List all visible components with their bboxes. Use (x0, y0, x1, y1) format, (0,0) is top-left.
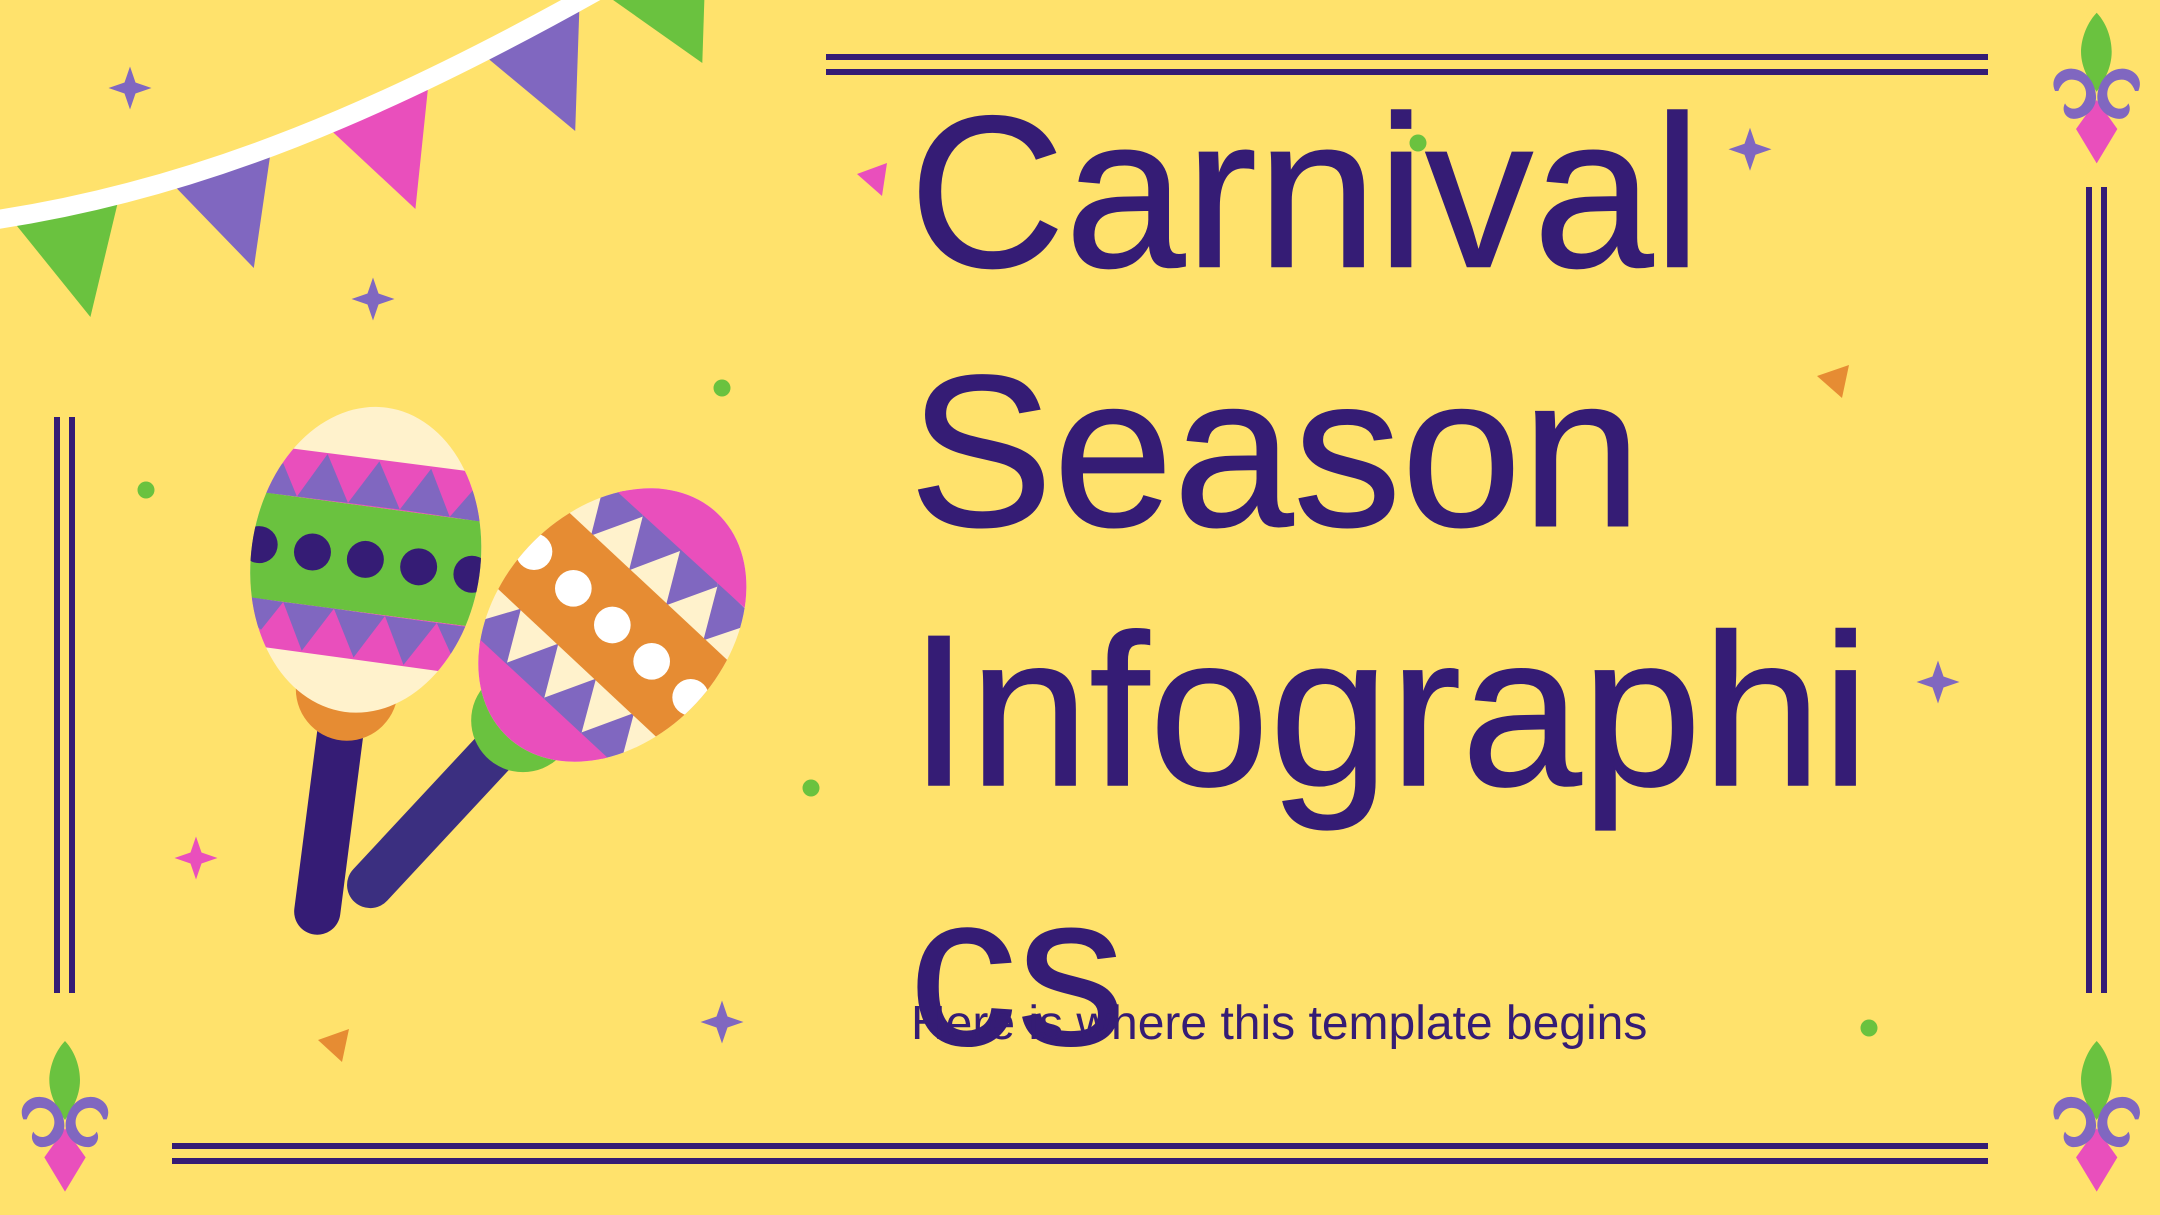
triangle: orange confetti right (1817, 365, 1849, 398)
green confetti dots (138, 134, 1878, 1036)
triangle: orange confetti bottom (318, 1029, 349, 1062)
title: Infographi (909, 589, 1870, 831)
title: Carnival (909, 70, 1701, 312)
title: cs (909, 848, 1125, 1090)
bottom border double line (172, 1143, 1988, 1164)
title: Season (909, 330, 1642, 572)
fleur-de-lis: bottom left (22, 1041, 108, 1192)
maraca 1 (231, 392, 501, 912)
right border double line (2086, 187, 2107, 993)
sparkle: right (1916, 660, 1960, 704)
maraca 2 handle and calyx (370, 669, 575, 885)
fleur-de-lis: bottom right (2053, 1041, 2140, 1192)
maraca 2 head (478, 488, 746, 762)
top border double line (826, 54, 1988, 75)
triangle: pink confetti (857, 163, 887, 196)
sparkle: below bunting (352, 278, 394, 320)
fleur-de-lis: top right (2053, 13, 2140, 163)
sparkle: pink left (174, 836, 218, 880)
left border double line (54, 417, 75, 993)
maracas illustration (250, 406, 746, 935)
sparkle: bottom center (700, 1000, 744, 1044)
subtitle: Here is where this template begins (911, 997, 1647, 1050)
bunting garland (0, 0, 704, 317)
sparkle: top right (1728, 128, 1772, 171)
sparkle: top left (108, 66, 152, 110)
